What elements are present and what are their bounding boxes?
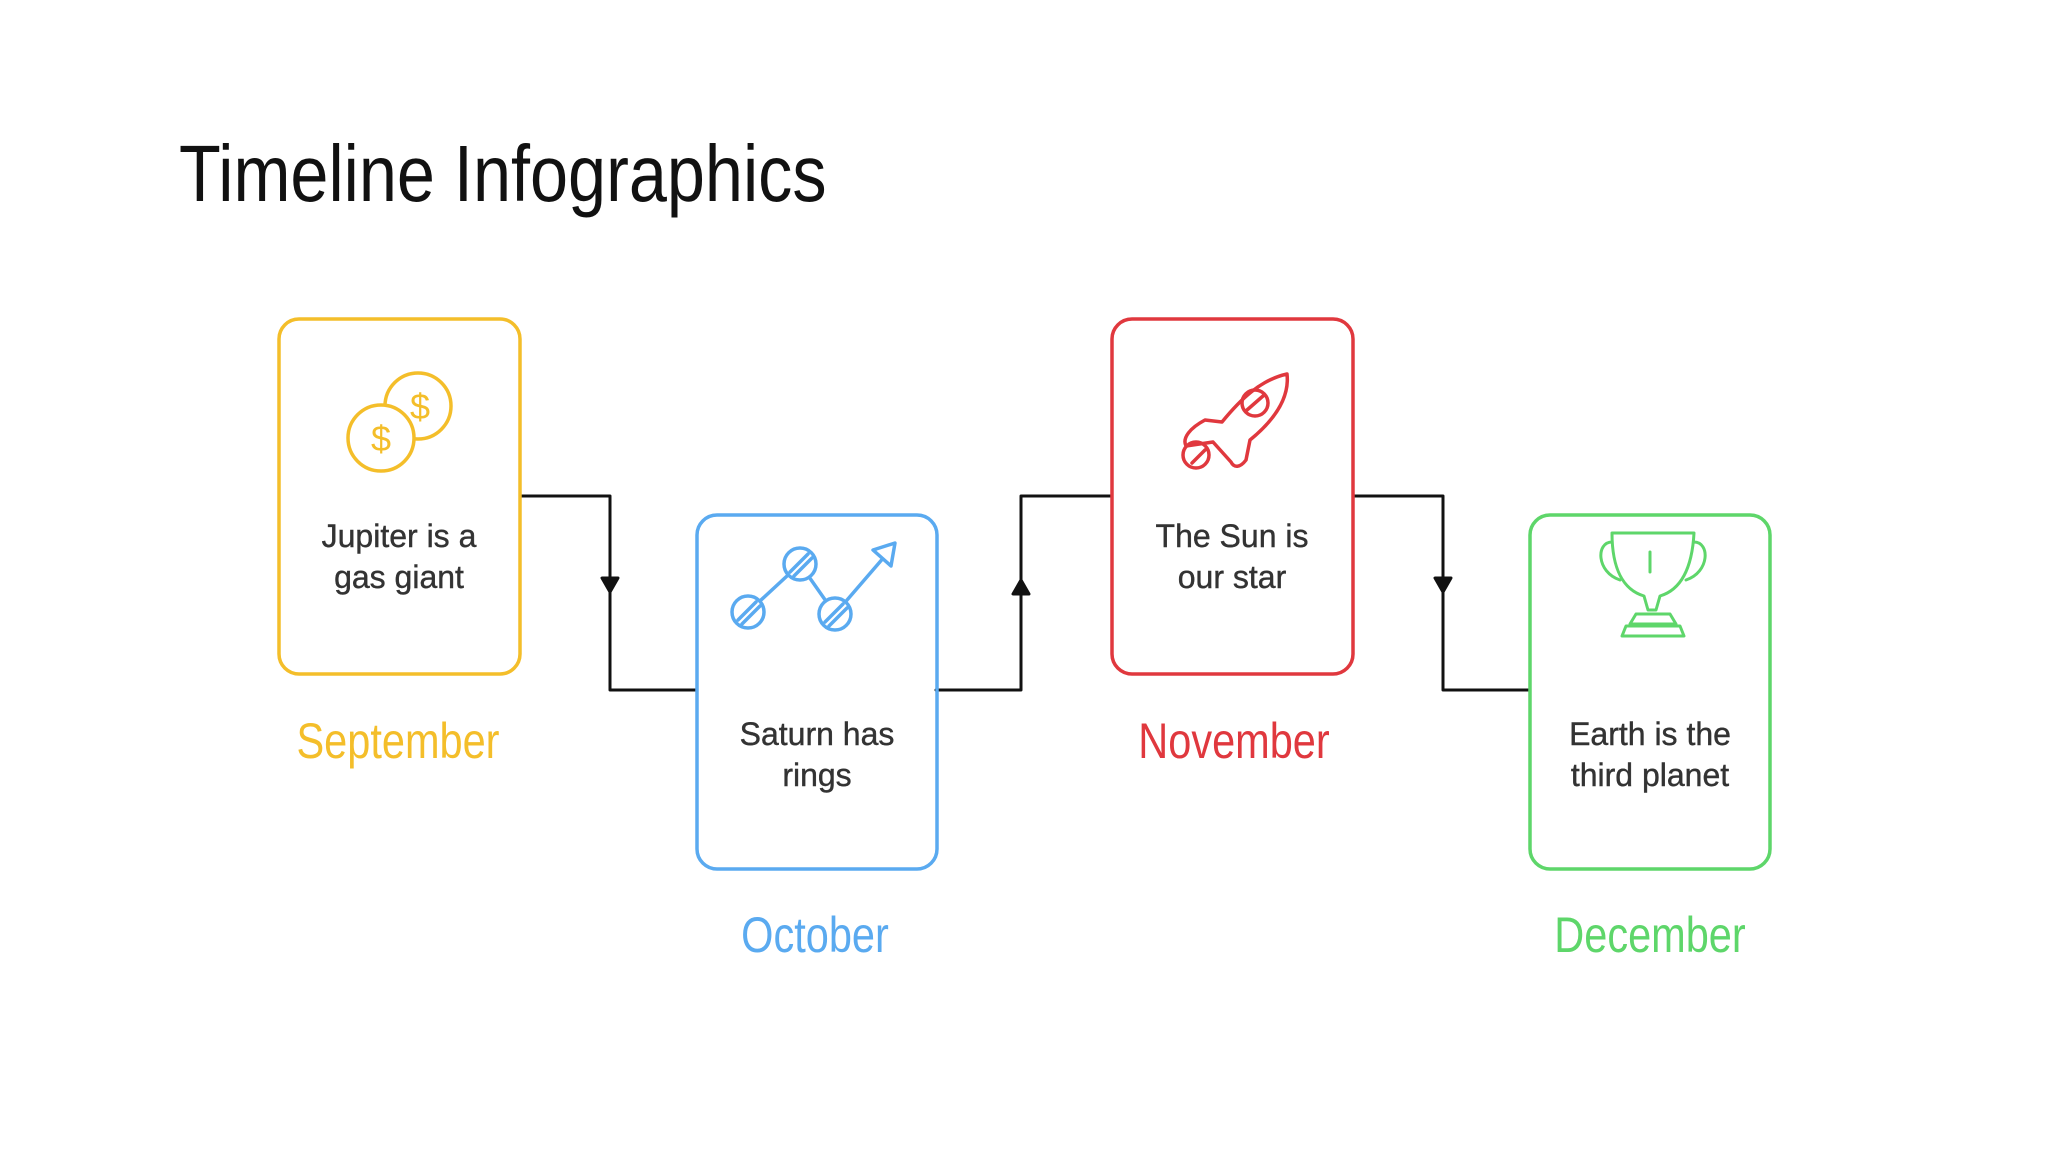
title: Timeline Infographics <box>179 129 827 218</box>
connector: november to december <box>1353 496 1529 690</box>
connector: october to november <box>936 496 1111 690</box>
text: december card <box>1569 716 1731 793</box>
text: november card <box>1156 518 1308 595</box>
card: september <box>279 319 520 674</box>
text: october card: Saturn has <box>740 716 894 752</box>
card: december <box>1530 515 1770 869</box>
text: october card: rings <box>782 757 852 793</box>
label: september: September <box>296 713 500 769</box>
label: november: November <box>1138 713 1330 769</box>
card: november <box>1112 319 1353 674</box>
text: september card: gas giant <box>334 559 464 595</box>
label: december: December <box>1554 907 1746 963</box>
text: november card: The Sun is <box>1156 518 1308 554</box>
icon: chart <box>732 543 895 630</box>
icon: trophy <box>1601 533 1705 636</box>
icon: coins: $ <box>410 386 430 427</box>
text: september card <box>322 518 477 595</box>
connector: september to october <box>520 496 696 690</box>
text: december card: third planet <box>1571 757 1729 793</box>
text: october card <box>740 716 894 793</box>
icon: rocket <box>1183 374 1287 468</box>
card: october <box>697 515 937 869</box>
icon: coins <box>348 373 451 471</box>
icon: coins: $ <box>371 418 391 459</box>
text: december card: Earth is the <box>1569 716 1731 752</box>
text: september card: Jupiter is a <box>322 518 476 554</box>
label: october: October <box>741 907 889 963</box>
text: november card: our star <box>1178 559 1286 595</box>
